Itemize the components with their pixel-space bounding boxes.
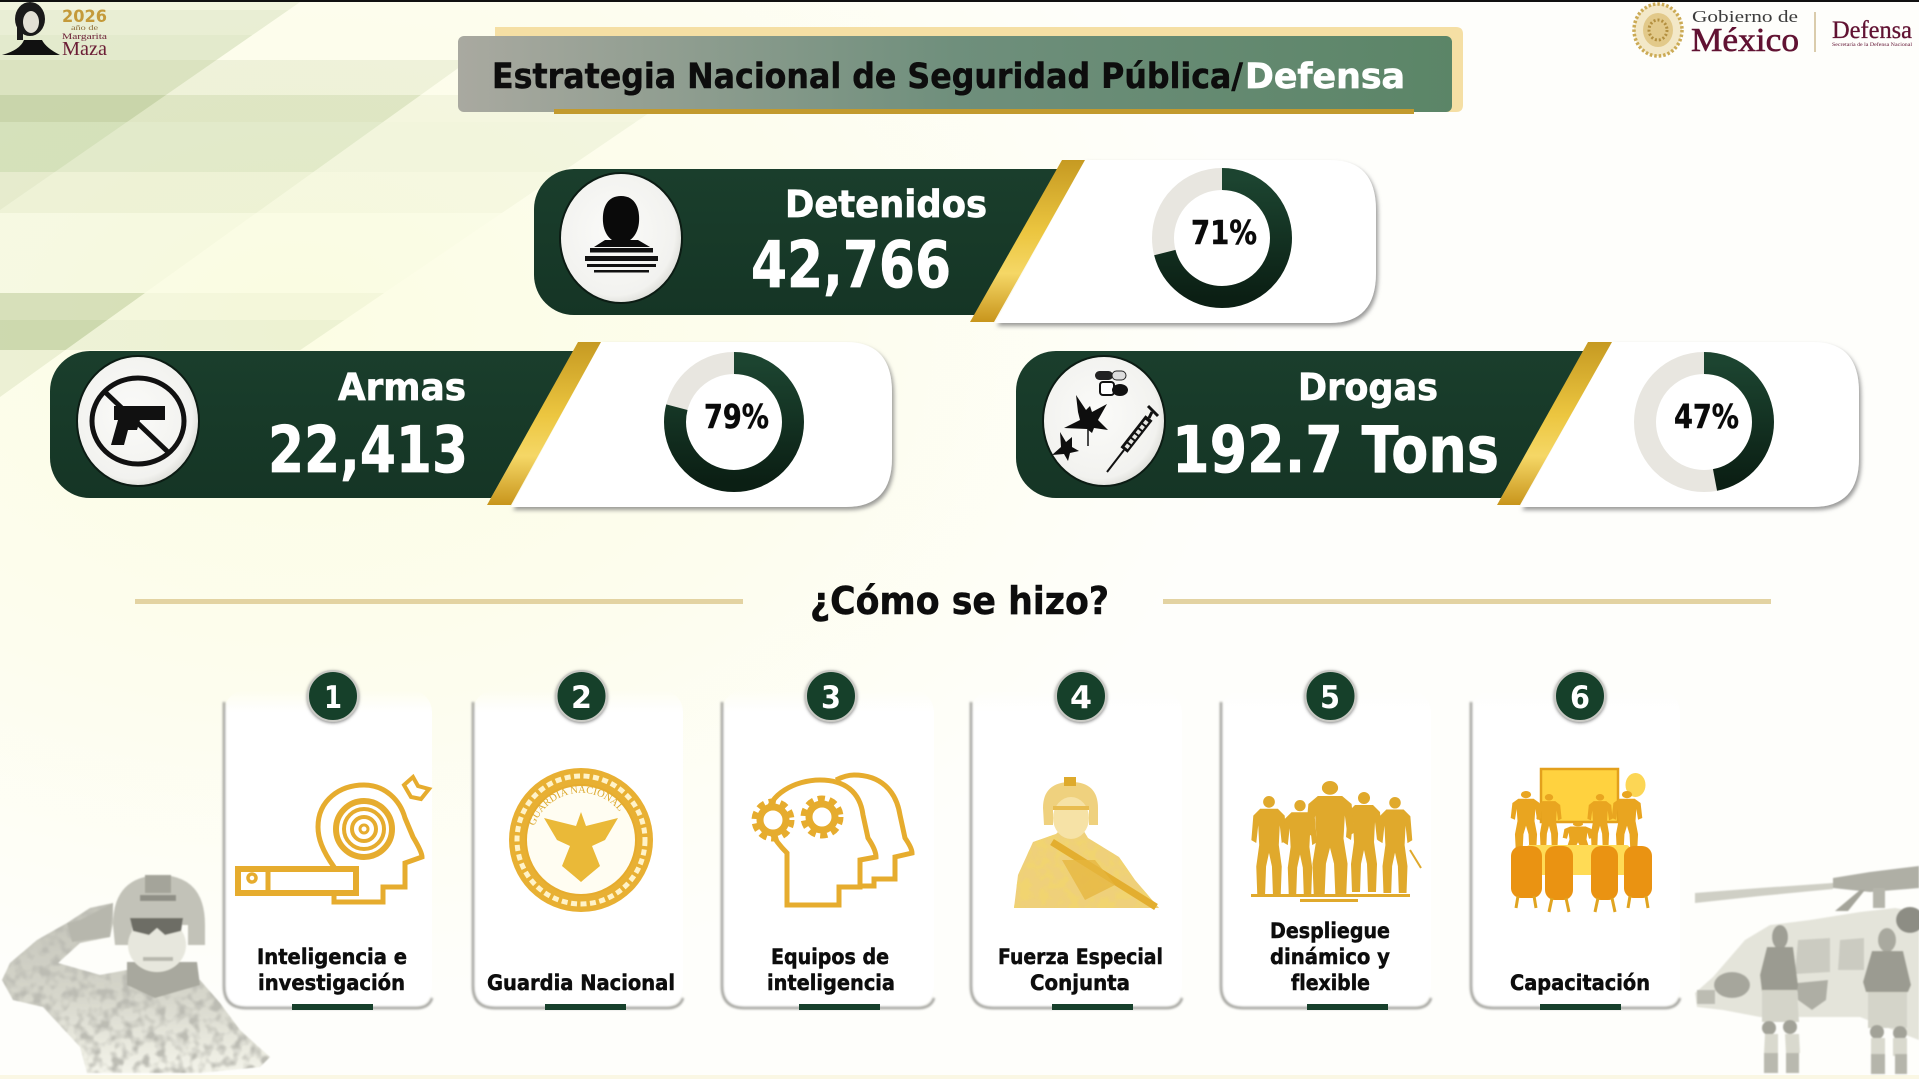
panel: Armas [50,342,892,507]
logo: 2026 año de Margarita Maza: Maza [62,38,107,60]
logo: 2026 año de Margarita Maza: Margarita [62,31,107,41]
icon: soldiers silhouette [1251,781,1421,902]
label: Detenidos: Detenidos [785,183,987,226]
number badge 4: 4 [1070,680,1092,716]
number badge 5 [1306,671,1356,721]
soldier watermark, bottom left [2,875,270,1073]
icon: special forces soldier [1014,777,1159,908]
label: Conjunta [1030,971,1130,996]
label: Despliegue [1270,919,1390,944]
number badge 1: 1 [324,680,342,716]
section heading: ¿Cómo se hizo?: ¿Cómo se hizo? [810,579,1109,623]
card 4: Fuerza Especial Conjunta [971,671,1182,1010]
icon: Guardia Nacional seal: GUARDIA NACIONAL [530,786,622,825]
number badge 2 [556,671,606,721]
number badge 6 [1555,671,1605,721]
helicopter watermark, bottom right [1695,866,1919,1074]
donut chart: 71%: 71% [1191,213,1257,252]
label: Drogas: Drogas [1298,366,1438,409]
icon: training meeting [1511,769,1652,912]
card 3: Equipos de inteligencia [722,671,934,1010]
icon: Guardia Nacional seal [509,768,653,912]
icon: national seal [1634,4,1682,56]
soldier figure right [1863,928,1911,1074]
number badge 2: 2 [571,680,592,716]
number badge 5: 5 [1320,680,1340,716]
donut chart: 71% [1163,179,1281,297]
heading: title text: Estrategia Nacional de Seguridad Pública/ [492,57,1243,97]
card 6: Capacitación [1471,671,1680,1010]
icon: detainee [560,173,682,303]
logo: 2026 año de Margarita Maza: 2026 [62,7,107,27]
logo: Gobierno de México / Defensa: Gobierno de [1692,7,1798,26]
label: Equipos de [771,945,889,970]
card 1: Inteligencia e investigación [224,671,432,1010]
label: Fuerza Especial [998,945,1163,970]
number badge 4 [1056,671,1106,721]
number badge 6: 6 [1570,680,1590,716]
label: flexible [1291,971,1370,996]
label: Guardia Nacional [487,971,675,996]
logo: 2026 año de Margarita Maza [2,2,107,60]
number badge 3: 3 [821,680,841,716]
title banner [458,27,1463,114]
card 5: Despliegue dinámico y flexible [1221,671,1431,1010]
number badge 1 [308,671,358,721]
label: dinámico y [1270,945,1390,970]
logo: Gobierno de México / Defensa [1634,4,1913,59]
logo: Gobierno de México / Defensa: Defensa [1832,17,1912,44]
donut chart: 47%: 47% [1674,397,1739,436]
label: investigación [258,971,405,996]
number badge 3 [806,671,856,721]
soldier figure left [1760,925,1800,1073]
number: 192.7 Tons: 192.7 Tons [1172,414,1499,488]
donut chart: 79%: 79% [704,397,769,436]
label: inteligencia [767,971,895,996]
number: 42,766: 42,766 [751,229,951,303]
icon: team heads with gears [755,775,912,905]
panel: Detenidos [534,160,1376,323]
icon: target in head [238,777,429,902]
logo: Gobierno de México / Defensa: México [1691,22,1799,59]
icon: drugs [1043,356,1165,486]
label: Armas: Armas [338,366,466,409]
section heading: ¿Cómo se hizo? [135,579,1771,623]
panel: Drogas [1016,342,1859,507]
card 2: Guardia Nacional [470,668,685,1010]
logo: Gobierno de México / Defensa: Secretaría de la Defensa Nacional [1832,41,1913,48]
label: Inteligencia e [257,945,407,970]
label: Capacitación [1510,971,1650,996]
donut chart: 47% [1645,363,1763,481]
donut chart: 79% [675,363,793,481]
icon: no weapons [77,356,199,486]
number: 22,413: 22,413 [268,414,468,488]
logo: 2026 año de Margarita Maza: año de [71,24,98,32]
heading: title text: Defensa [1245,57,1405,97]
